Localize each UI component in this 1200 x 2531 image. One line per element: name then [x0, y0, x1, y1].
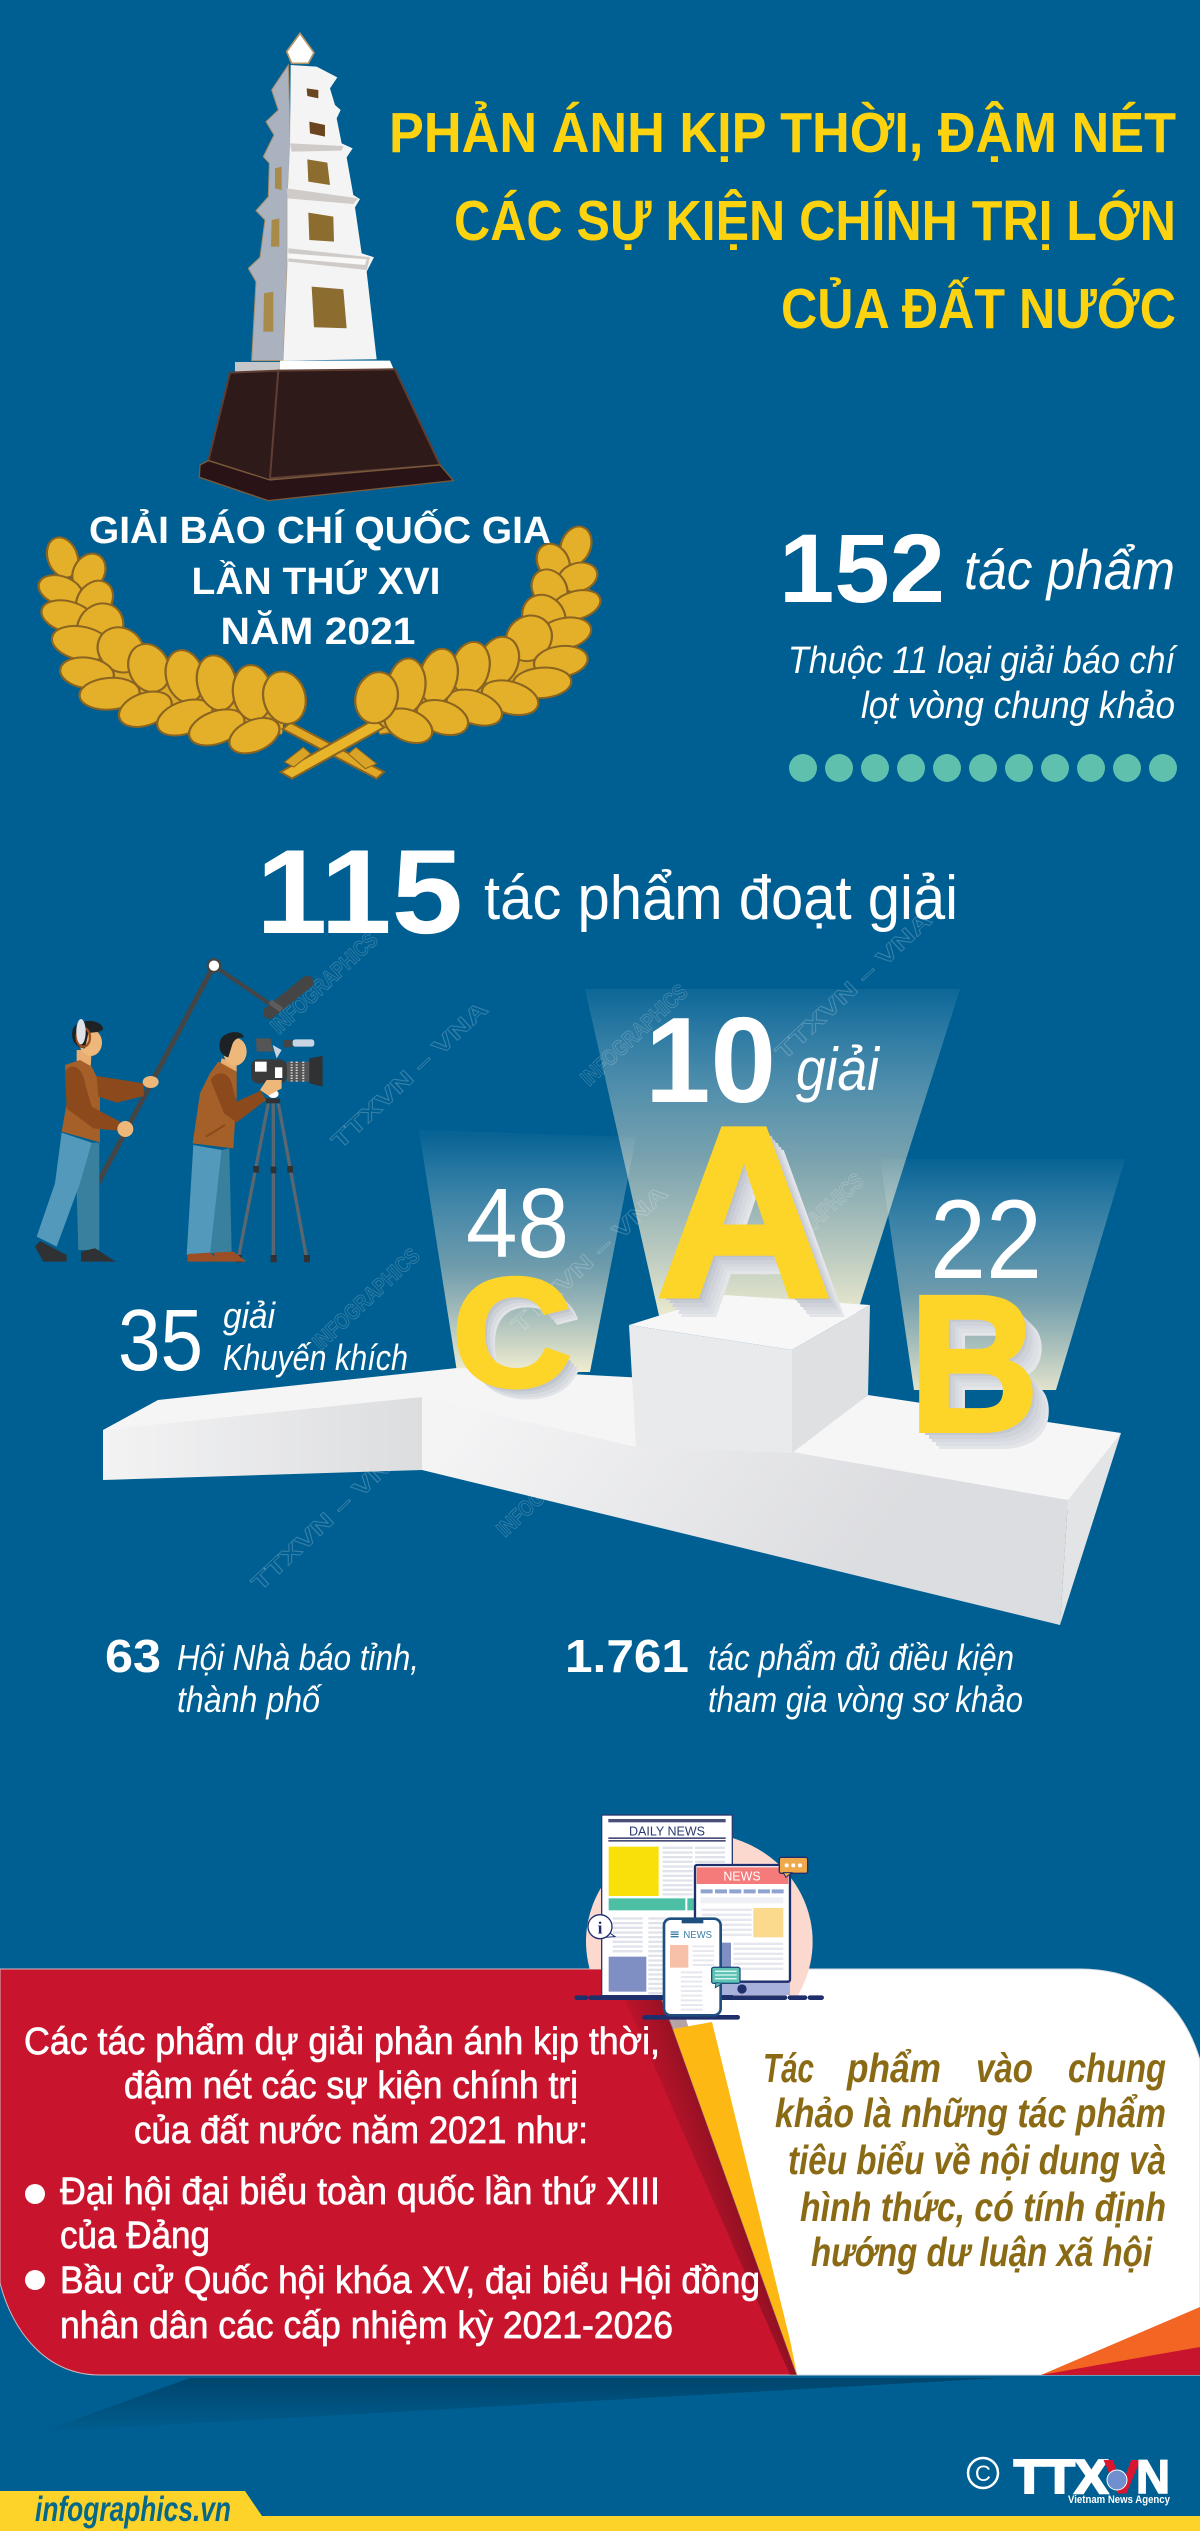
panel: red events background	[0, 1969, 797, 2375]
letter C: C	[464, 1258, 584, 1431]
text: events list: Bầu cử Quốc hội khóa XV, đại biểu Hội đồng	[60, 2260, 760, 2302]
text: events list: của đất nước năm 2021 như:	[134, 2110, 588, 2152]
logo: TTXVN: Vietnam News Agency	[1068, 2494, 1171, 2506]
letter A: A	[663, 1084, 839, 1355]
heading: 115 winning works: 115	[256, 825, 463, 959]
text: website: infographics.vn	[35, 2490, 231, 2529]
watermarks: INFOGRAPHICS	[575, 979, 693, 1091]
yellow diagonal stripe	[673, 2022, 797, 2375]
letter A: A	[660, 1081, 836, 1352]
text: events list: Các tác phẩm dự giải phản ánh kịp thời,	[24, 2021, 660, 2063]
podium	[103, 1295, 1121, 1625]
letter C: C	[459, 1253, 579, 1426]
tablet: NEWS	[723, 1870, 761, 1884]
text: finalist note: chung	[1068, 2045, 1166, 2091]
watermarks	[246, 907, 937, 1596]
watermarks: INFOGRAPHICS	[307, 1243, 425, 1355]
panel shadow	[40, 2378, 1000, 2432]
letter C: C	[452, 1246, 572, 1419]
letter A: A	[656, 1077, 832, 1348]
boom pole and microphone	[94, 959, 307, 1191]
letter B: B	[927, 1273, 1057, 1491]
footer: yellow band and site tab	[0, 2491, 1200, 2531]
letter B: B	[917, 1263, 1047, 1481]
stat: 1.761 eligible works: tham gia vòng sơ khảo	[708, 1679, 1023, 1720]
stat: 1.761 eligible works: 1.761	[565, 1630, 689, 1682]
heading: award name: NĂM 2021	[220, 609, 416, 653]
phone: NEWS	[683, 1930, 712, 1941]
bubble: info: i	[598, 1918, 603, 1937]
text: finalist note	[763, 2045, 1166, 2275]
panel: white note background	[640, 1969, 1200, 2375]
bubble: teal	[712, 1967, 740, 1988]
heading: award name: LẦN THỨ XVI	[192, 559, 440, 603]
stat: 63 journalist associations: Hội Nhà báo tỉnh,	[177, 1637, 419, 1678]
logo: TTXVN: TTX	[1014, 2450, 1108, 2503]
logo: TTXVN: N	[1136, 2450, 1170, 2503]
watermarks: TTXVN – VNA	[506, 1180, 673, 1338]
text: events list: của Đảng	[60, 2215, 210, 2257]
stat: 152 works: tác phẩm	[964, 538, 1175, 601]
stat: 22 B prizes: 22	[930, 1177, 1042, 1302]
tablet	[695, 1865, 790, 1995]
watermarks: TTXVN – VNA	[326, 996, 493, 1154]
stat: 152 works	[779, 514, 1178, 727]
icon: golden wheat wreath	[33, 523, 605, 779]
bubble: orange	[779, 1857, 808, 1877]
person: boom operator	[35, 1019, 159, 1262]
stat: 35 consolation prizes: giải	[223, 1295, 276, 1336]
icon: pagoda tower trophy	[199, 33, 453, 501]
phone	[664, 1919, 721, 2015]
heading: award name: GIẢI BÁO CHÍ QUỐC GIA	[89, 507, 551, 552]
watermarks: INFOGRAPHICS	[751, 1168, 869, 1280]
letter B: B	[924, 1270, 1054, 1488]
dots: 11 award categories	[789, 754, 1177, 782]
bubble: info	[588, 1915, 615, 1939]
icon: newspaper, tablet and phone	[574, 1814, 824, 2020]
letter A: A	[669, 1091, 845, 1362]
logo: TTXVN: C	[975, 2461, 991, 2486]
corner accent: orange and red	[1041, 2307, 1200, 2375]
podium: low step for consolation prizes	[103, 1368, 645, 1480]
text: events list	[24, 2021, 760, 2347]
heading: 115 winning works: tác phẩm đoạt giải	[484, 864, 958, 933]
watermarks: INFOGRAPHICS	[265, 927, 383, 1039]
podium: main block	[422, 1395, 1121, 1625]
stat: 63 journalist associations	[105, 1630, 419, 1720]
stat: 10 A prizes	[645, 992, 880, 1128]
title	[389, 100, 1176, 341]
stat: 63 journalist associations: 63	[105, 1630, 161, 1682]
newspaper: DAILY NEWS	[629, 1825, 705, 1839]
stat: 63 journalist associations: thành phố	[177, 1679, 323, 1720]
letter B: B	[909, 1255, 1039, 1473]
newspaper	[602, 1815, 732, 1996]
tripod and video camera	[236, 1038, 323, 1262]
letter A: A	[666, 1088, 842, 1359]
letter A: A	[672, 1095, 848, 1366]
stat: 152 works: 152	[779, 514, 945, 623]
stat: 10 A prizes: giải	[796, 1036, 880, 1103]
letter A: A	[675, 1098, 851, 1369]
decorative shade on red panel	[625, 2000, 797, 2375]
text: events list: nhân dân các cấp nhiệm kỳ 2021-2026	[60, 2305, 673, 2347]
text: events list: đậm nét các sự kiện chính trị	[124, 2065, 578, 2107]
stat: 48 C prizes: 48	[466, 1168, 569, 1278]
stat: 152 works: lọt vòng chung khảo	[861, 685, 1175, 727]
ground lines	[577, 1998, 822, 2017]
stat: 10 A prizes: 10	[645, 992, 776, 1128]
text: finalist note: Tác	[763, 2045, 814, 2091]
letter C: C	[456, 1250, 576, 1423]
illustration: boom operator and cameraman	[35, 959, 323, 1262]
stat: 35 consolation prizes: Khuyến khích	[223, 1337, 408, 1378]
podium: first place box	[629, 1295, 870, 1453]
letter B: B	[913, 1259, 1043, 1477]
logo: TTXVN: V	[1104, 2450, 1141, 2503]
text: finalist note: phẩm	[846, 2045, 941, 2091]
stat: 1.761 eligible works: tác phẩm đủ điều kiện	[708, 1637, 1014, 1678]
spotlight beams	[419, 989, 1125, 1390]
watermarks: INFOGRAPHICS	[491, 1430, 609, 1542]
logo: TTXVN	[968, 2450, 1171, 2506]
pink circle	[586, 1838, 813, 1996]
heading: 115 winning works	[256, 825, 958, 959]
text: events list: Đại hội đại biểu toàn quốc lần thứ XIII	[60, 2171, 660, 2213]
watermarks: TTXVN – VNA	[770, 907, 937, 1065]
stat: 1.761 eligible works	[565, 1630, 1023, 1720]
stat: 35 consolation prizes	[118, 1292, 408, 1389]
letter B: B	[920, 1266, 1050, 1484]
heading: award name	[89, 507, 551, 653]
letter C: C	[462, 1256, 582, 1429]
watermarks: TTXVN – VNA	[246, 1438, 413, 1596]
person: cameraman	[187, 1032, 282, 1262]
text: finalist note: vào	[976, 2045, 1033, 2091]
stat: 35 consolation prizes: 35	[118, 1292, 203, 1389]
